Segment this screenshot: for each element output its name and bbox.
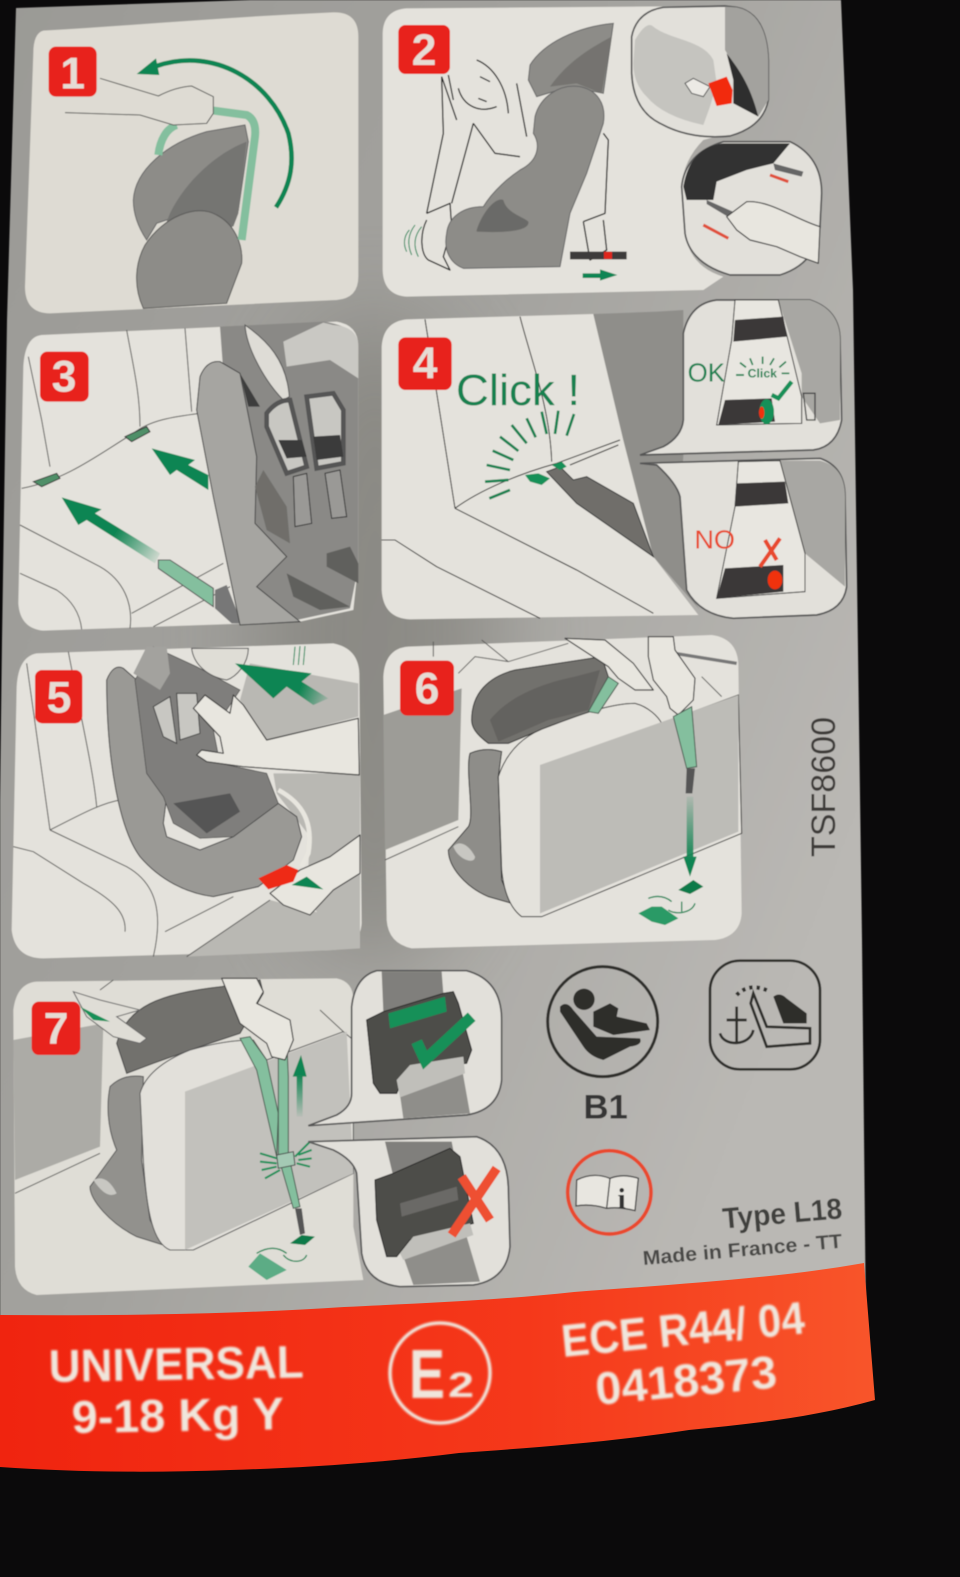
seat	[197, 322, 358, 625]
icon: read manual	[568, 1151, 651, 1234]
click rays	[260, 1142, 312, 1178]
inset: correct buckle	[308, 971, 502, 1126]
universal text	[48, 1336, 304, 1443]
approval text: 0418373	[593, 1345, 779, 1415]
inset: NO: NO	[694, 524, 735, 554]
seat behind	[448, 657, 608, 903]
inset: OK: Click	[748, 366, 777, 380]
type text	[642, 1192, 843, 1270]
hand	[193, 695, 359, 775]
curved arrow	[137, 58, 292, 207]
hands	[222, 978, 293, 1060]
step badge 4: 4	[413, 339, 438, 388]
orange band	[0, 1263, 875, 1472]
type text: Made in France - TT	[642, 1231, 843, 1270]
click label	[456, 366, 580, 498]
webbing	[547, 467, 653, 557]
panel 2	[383, 6, 822, 297]
panel 3	[18, 322, 358, 631]
approval text: ECE R44/ 04	[559, 1291, 807, 1367]
icons column	[548, 961, 843, 1270]
panel 1	[25, 12, 358, 313]
inset: OK	[640, 300, 842, 455]
inset: pull handle	[682, 142, 822, 275]
step badge 3: 3	[52, 353, 76, 402]
code TSF8600: TSF8600	[805, 717, 843, 857]
green strap	[158, 108, 255, 240]
hands and strap	[588, 677, 618, 713]
universal text: 9-18 Kg Y	[71, 1387, 284, 1443]
connector	[158, 560, 213, 607]
panel 5	[12, 643, 362, 958]
green arrow	[683, 797, 697, 877]
strap	[240, 1035, 315, 1245]
person line art	[422, 60, 608, 270]
E2 mark: E	[409, 1335, 445, 1413]
anchors	[33, 427, 150, 487]
universal text: UNIVERSAL	[48, 1336, 304, 1392]
E2 mark: 2	[448, 1366, 474, 1405]
step badge 6: 6	[415, 664, 439, 713]
step badge 2: 2	[412, 26, 436, 75]
seat front	[137, 211, 242, 308]
anchor pictogram	[638, 896, 695, 925]
panel 4	[382, 300, 847, 619]
icon: read manual: i	[617, 1183, 626, 1216]
step badge 3	[40, 352, 89, 402]
seat	[107, 647, 302, 897]
up arrow	[293, 1055, 307, 1117]
type text: Type L18	[721, 1192, 843, 1236]
inset: OK: OK	[688, 358, 726, 388]
bench	[498, 695, 742, 917]
seat rear	[133, 125, 248, 240]
step badge 7	[32, 1002, 80, 1055]
inset: latch	[632, 6, 768, 137]
approval text	[559, 1291, 807, 1415]
icon: anchor seat	[710, 961, 820, 1069]
seat behind	[90, 980, 263, 1245]
shake marks	[404, 225, 422, 257]
release handle	[570, 252, 627, 259]
step badge 6	[400, 661, 454, 716]
green anchors	[525, 462, 567, 485]
bench	[140, 1032, 353, 1250]
panel 6	[383, 635, 742, 948]
step badge 7: 7	[44, 1004, 68, 1053]
label sheet	[0, 0, 866, 1340]
inset: wrong buckle	[308, 1137, 510, 1287]
green arrows	[62, 448, 208, 563]
hand	[65, 78, 213, 125]
click label: Click !	[456, 366, 580, 415]
icon: B1 group: B1	[584, 1088, 628, 1126]
green arrow	[235, 663, 328, 705]
anchor pictogram	[248, 1248, 307, 1280]
E2 mark	[390, 1323, 490, 1423]
inset: NO	[640, 458, 847, 618]
step badge 1	[49, 47, 97, 98]
step badge 4	[398, 337, 452, 390]
step badge 2	[398, 25, 450, 75]
panel 7	[13, 971, 510, 1295]
icon: B1 group	[548, 967, 658, 1126]
green arrow	[583, 269, 617, 281]
lower hand and release	[258, 790, 360, 915]
step badge 5: 5	[47, 674, 71, 723]
step badge 1: 1	[60, 49, 85, 98]
step badge 5	[35, 670, 82, 723]
seat	[446, 23, 613, 268]
